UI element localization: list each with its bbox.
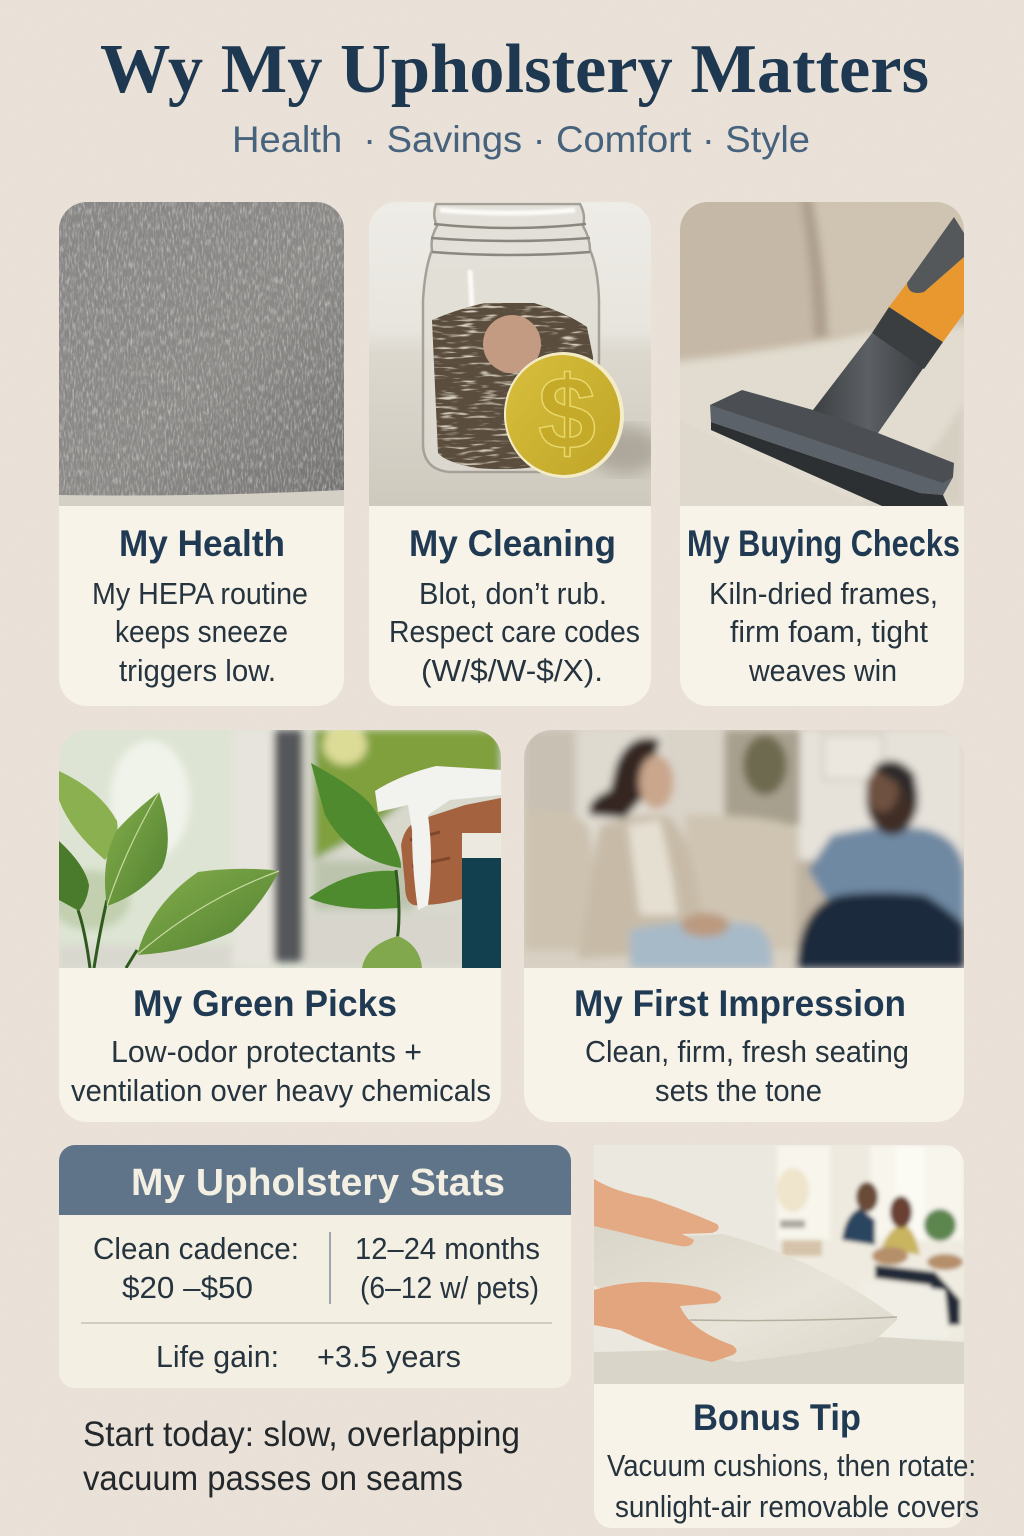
top hand bbox=[594, 1179, 719, 1246]
man bbox=[808, 828, 964, 925]
photo: coin jar: $ bbox=[538, 356, 596, 472]
panel: my green picks bbox=[50, 725, 503, 1122]
neck bbox=[813, 333, 923, 433]
photo: plant and spray bottle bbox=[50, 725, 503, 970]
body text bbox=[607, 1448, 979, 1524]
panel: my buying checks bbox=[670, 190, 975, 706]
collar bbox=[872, 307, 943, 369]
body text: Blot, don’t rub. bbox=[419, 576, 607, 611]
body text: Respect care codes bbox=[389, 614, 640, 649]
pillow bbox=[594, 1222, 898, 1362]
body text: weaves win bbox=[748, 653, 897, 688]
stats header bbox=[59, 1145, 571, 1215]
photo: vacuum on sofa bbox=[680, 202, 964, 506]
people bbox=[842, 1208, 875, 1245]
panel: my upholstery stats bbox=[59, 1145, 571, 1388]
photo: grey fabric bbox=[59, 202, 344, 506]
body text: Clean, firm, fresh seating bbox=[585, 1034, 909, 1069]
body text: keeps sneeze bbox=[115, 614, 288, 649]
panel: my first impression bbox=[524, 730, 964, 1122]
stat: clean cadence: $20 –$50 bbox=[122, 1270, 253, 1305]
seat bbox=[594, 1337, 964, 1384]
title: Wy My Upholstery Matters bbox=[100, 31, 929, 108]
body text: triggers low. bbox=[119, 653, 276, 688]
grip bbox=[907, 217, 964, 293]
back leaves bbox=[311, 763, 401, 868]
body text: Low-odor protectants + bbox=[111, 1034, 422, 1069]
stat: life gain bbox=[156, 1339, 461, 1374]
body text bbox=[92, 576, 308, 688]
body text: (W/$/W-$/X). bbox=[421, 653, 603, 688]
jar bbox=[423, 204, 599, 472]
heading: My Health bbox=[119, 523, 285, 564]
body text: Kiln-dried frames, bbox=[709, 576, 938, 611]
photo: couple on sofa bbox=[524, 730, 964, 968]
body text bbox=[71, 1034, 491, 1108]
panel: my health bbox=[59, 202, 344, 706]
body text: Vacuum cushions, then rotate: bbox=[607, 1448, 976, 1483]
heading: My Buying Checks bbox=[687, 523, 960, 564]
stat: months bbox=[355, 1231, 540, 1305]
heading: My First Impression bbox=[574, 983, 906, 1024]
stat: months: 12–24 months bbox=[355, 1231, 540, 1266]
lower hand bbox=[594, 1282, 737, 1362]
heading: My Green Picks bbox=[133, 983, 397, 1024]
subtitle: Health · Savings · Comfort · Style bbox=[232, 119, 810, 160]
panel: my cleaning bbox=[369, 202, 661, 706]
heading: Bonus Tip bbox=[693, 1397, 861, 1438]
photo: pillow and hands bbox=[594, 1145, 964, 1384]
call to action bbox=[83, 1415, 520, 1498]
body text: sunlight-air removable covers bbox=[615, 1489, 979, 1524]
body text: My HEPA routine bbox=[92, 576, 308, 611]
panel: bonus tip bbox=[594, 1145, 979, 1528]
copper coin bbox=[483, 315, 541, 373]
stat: clean cadence bbox=[93, 1231, 299, 1305]
orange band bbox=[889, 257, 964, 342]
stat: life gain: +3.5 years bbox=[317, 1339, 461, 1374]
coins inside bbox=[432, 303, 593, 469]
stats header: My Upholstery Stats bbox=[131, 1162, 505, 1204]
body text bbox=[585, 1034, 909, 1108]
woman bbox=[578, 815, 712, 958]
call to action: Start today: slow, overlapping bbox=[83, 1415, 520, 1454]
body text: firm foam, tight bbox=[730, 614, 928, 649]
vacuum bbox=[710, 217, 964, 506]
heading: My Cleaning bbox=[409, 523, 616, 564]
body text: ventilation over heavy chemicals bbox=[71, 1073, 491, 1108]
body text bbox=[389, 576, 640, 688]
brush head bbox=[710, 390, 954, 495]
stat: months: (6–12 w/ pets) bbox=[360, 1270, 539, 1305]
stat: clean cadence: Clean cadence: bbox=[93, 1231, 299, 1266]
gold coin bbox=[504, 352, 624, 478]
stat: life gain: Life gain: bbox=[156, 1339, 279, 1374]
hand and bottle bbox=[401, 798, 501, 905]
call to action: vacuum passes on seams bbox=[83, 1459, 463, 1498]
body text bbox=[709, 576, 938, 688]
front leaves bbox=[78, 900, 137, 968]
photo: coin jar bbox=[369, 202, 661, 506]
body text: sets the tone bbox=[655, 1073, 822, 1108]
